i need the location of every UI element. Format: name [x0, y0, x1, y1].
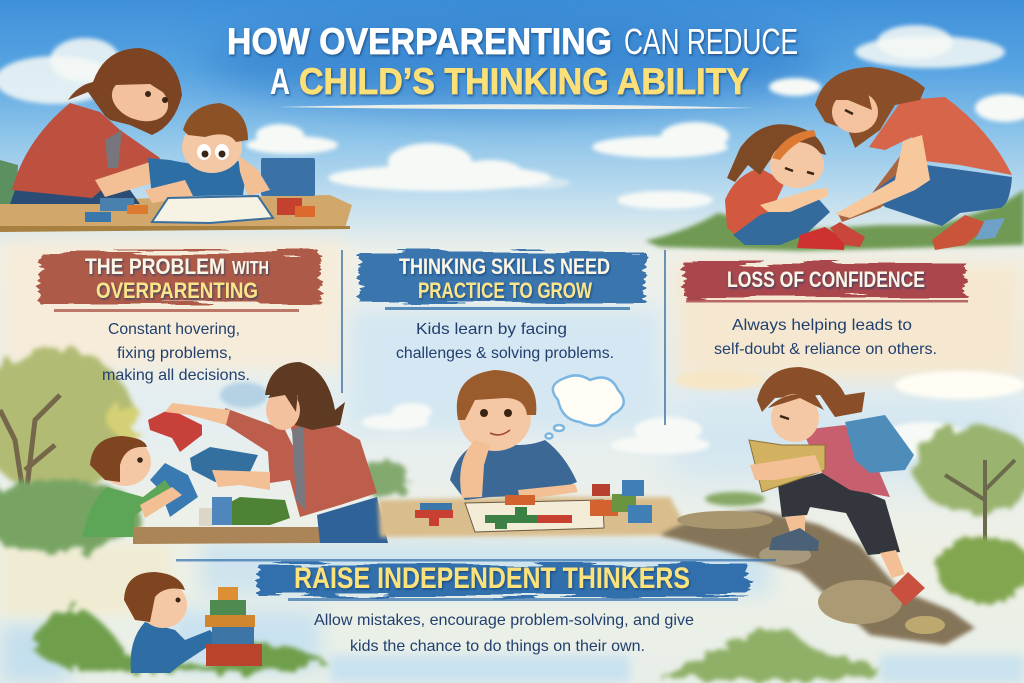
body text	[714, 317, 937, 358]
title underline	[277, 104, 755, 109]
left trees	[0, 348, 409, 551]
panel: thinking skills	[360, 252, 645, 362]
heading text: OVERPARENTING	[96, 278, 258, 303]
heading banner	[360, 252, 645, 310]
heading text	[399, 254, 610, 303]
illustration: rocks	[660, 492, 975, 645]
body text: Kids learn by facing	[416, 321, 567, 338]
heading text: RAISE INDEPENDENT THINKERS	[294, 562, 690, 595]
illustration: boy with block tower	[32, 572, 330, 674]
body text: self-doubt & reliance on others.	[714, 341, 937, 358]
panel: the problem with overparenting	[40, 252, 320, 384]
icon: thought cloud	[546, 375, 624, 438]
heading banner	[176, 559, 776, 601]
body text: kids the chance to do things on their own.	[350, 638, 645, 655]
heading text: PRACTICE TO GROW	[418, 278, 592, 303]
heading text	[85, 254, 269, 303]
title: A	[270, 61, 290, 102]
panel: raise independent thinkers	[176, 559, 776, 655]
title: CAN REDUCE	[624, 21, 798, 62]
body text: Allow mistakes, encourage problem-solving, and give	[314, 612, 694, 629]
illustration: parent tying girl's shoe	[645, 67, 1024, 251]
illustration: boy thinking with puzzle pieces	[378, 370, 690, 537]
heading text: WITH	[232, 258, 269, 278]
body text: Constant hovering,	[108, 321, 240, 338]
clouds	[0, 25, 1024, 458]
heading text: THINKING SKILLS NEED	[399, 254, 610, 279]
heading banner	[684, 263, 968, 302]
panel: loss of confidence	[684, 263, 968, 358]
illustration: girl climbing with map	[749, 367, 925, 606]
body text: challenges & solving problems.	[396, 345, 614, 362]
divider lines	[342, 250, 665, 425]
body text: fixing problems,	[117, 345, 232, 362]
body text	[102, 321, 250, 384]
illustration: parent helping boy with book	[0, 48, 352, 232]
heading text: THE PROBLEM	[85, 254, 225, 279]
body text: Always helping leads to	[732, 317, 912, 334]
body text	[396, 321, 614, 362]
title: CHILD’S THINKING ABILITY	[299, 61, 749, 102]
title	[227, 21, 798, 102]
illustration: grass right	[655, 627, 875, 680]
title: HOW OVERPARENTING	[227, 21, 612, 62]
heading text: LOSS OF CONFIDENCE	[727, 267, 925, 292]
right trees	[915, 425, 1024, 602]
body text: making all decisions.	[102, 367, 250, 384]
heading banner	[40, 252, 320, 312]
illustration: parent and child with puzzle	[82, 362, 388, 544]
body text	[314, 612, 694, 655]
